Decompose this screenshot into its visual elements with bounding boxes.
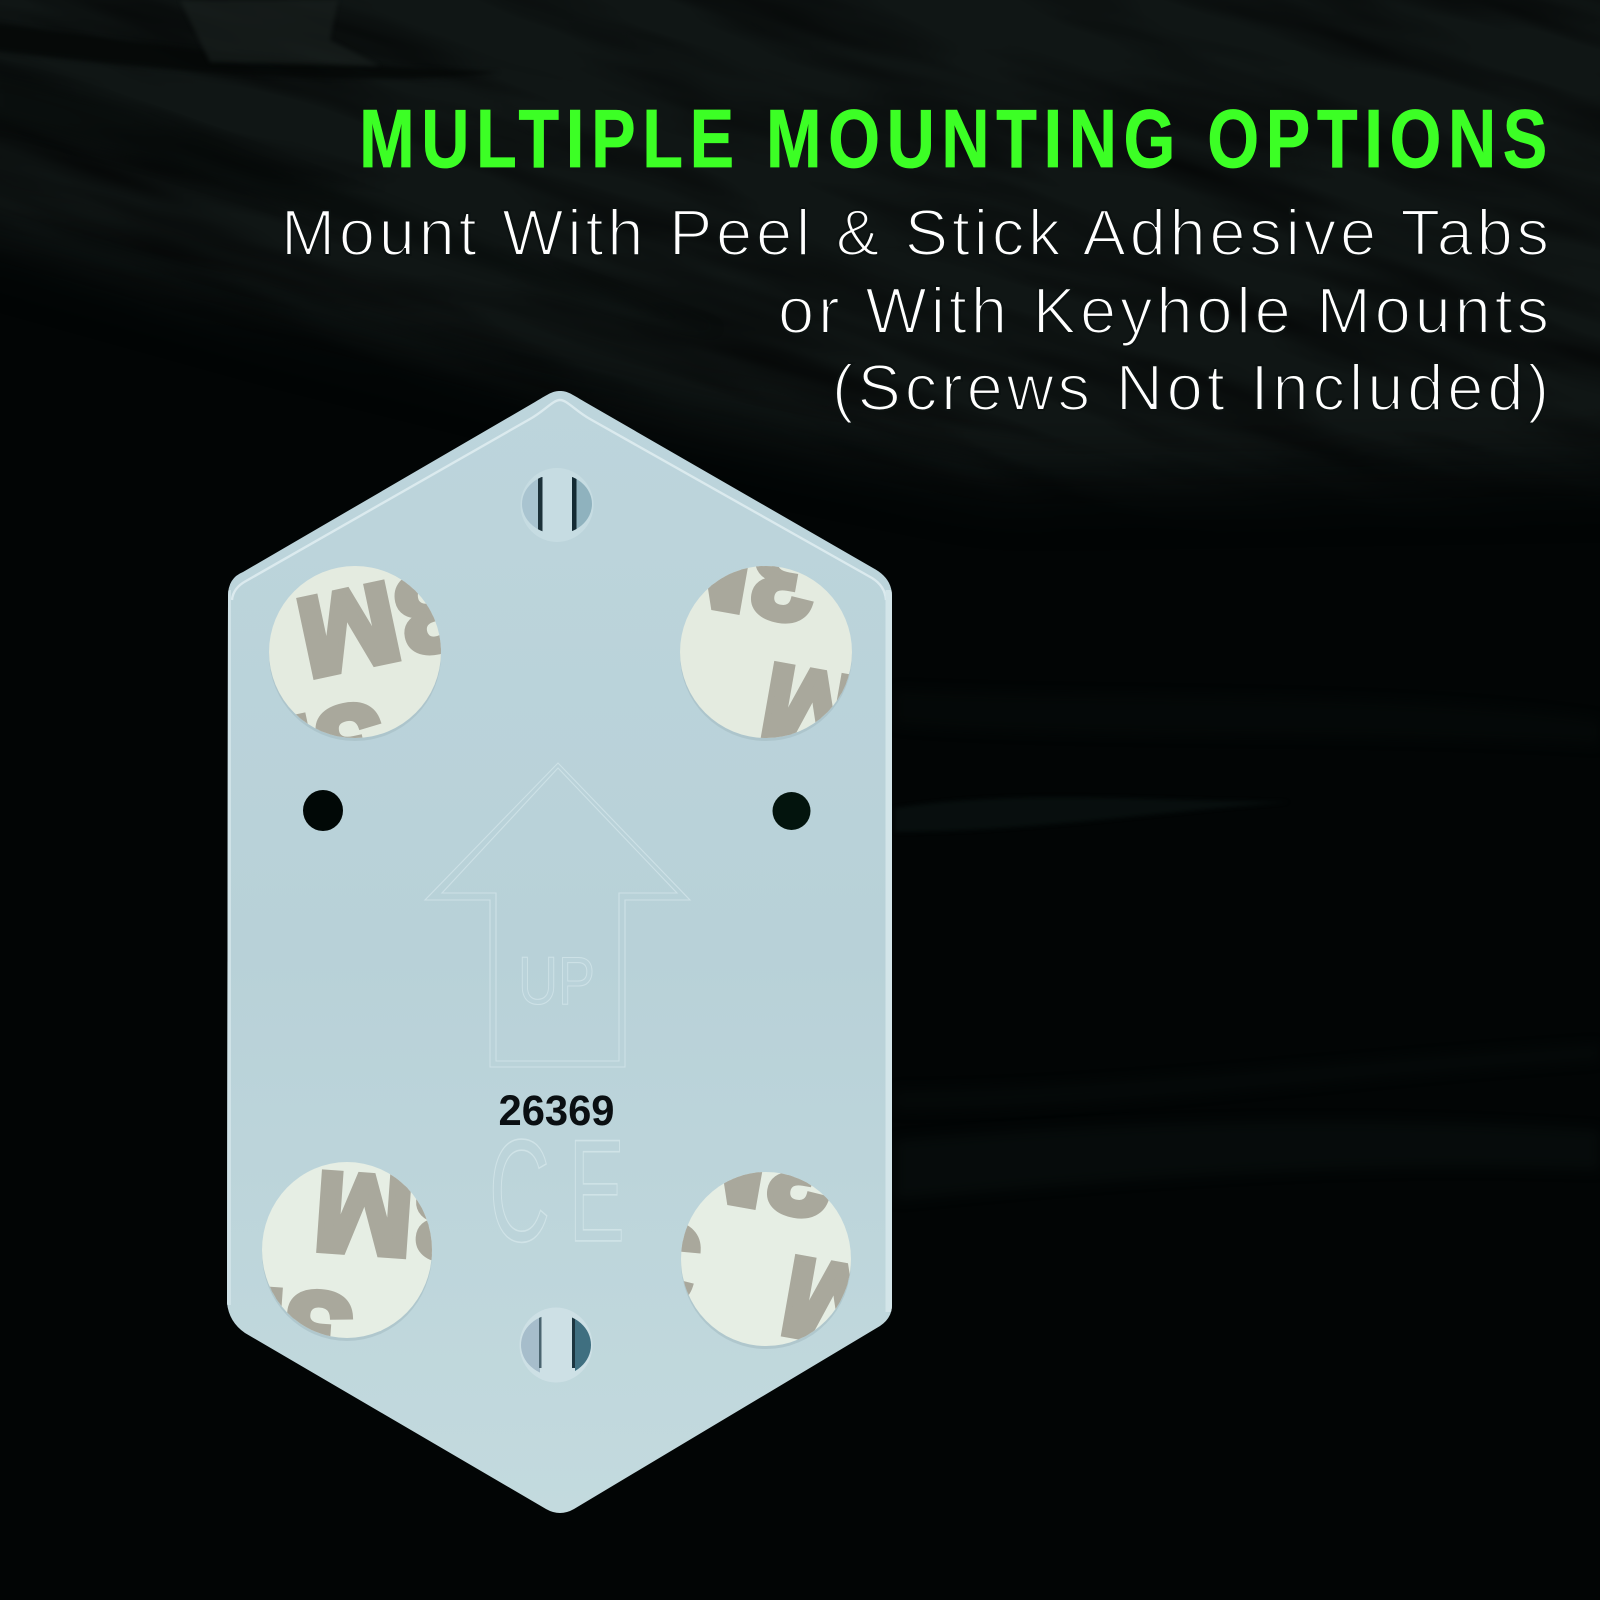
subtitle text block: Mount With Peel & Stick Adhesive Tabs	[281, 196, 1549, 269]
adhesive tab: bottom left: 3M	[181, 1260, 356, 1397]
title: MULTIPLE MOUNTING OPTIONS	[359, 92, 1547, 185]
adhesive tab: bottom right	[681, 1172, 851, 1349]
adhesive tab: bottom right: 3M	[772, 1232, 958, 1385]
adhesive tab: bottom right: 3M	[658, 1090, 844, 1243]
adhesive tab: top right: 3M	[642, 495, 828, 648]
printed number 26369: 26369	[498, 1087, 614, 1135]
subtitle text block	[281, 196, 1549, 424]
embossed up arrow	[425, 763, 690, 1067]
background: dark brush-stroke texture	[0, 0, 1600, 830]
plate bevel highlight	[229, 400, 889, 1312]
embossed UP label: UP	[518, 943, 595, 1019]
adhesive tab: bottom left	[262, 1162, 432, 1341]
bottom keyhole mount	[520, 1308, 595, 1382]
panel: mounting plate	[227, 391, 892, 1513]
adhesive tab: top left	[269, 566, 441, 741]
subtitle text block: (Screws Not Included)	[832, 351, 1549, 424]
adhesive tab: bottom right: 3M	[522, 1177, 708, 1330]
adhesive tab: top left: 3M	[287, 544, 476, 702]
subtitle text block: or With Keyhole Mounts	[778, 274, 1549, 347]
left screw hole	[303, 790, 343, 831]
plate body	[227, 391, 892, 1513]
adhesive tab: top right	[680, 566, 852, 741]
embossed CE mark: CE	[489, 1110, 625, 1273]
adhesive tab: bottom left: 3M	[310, 1148, 485, 1285]
top keyhole mount	[520, 468, 595, 542]
adhesive tab: top left: 3M	[208, 677, 397, 835]
right screw hole	[772, 792, 810, 830]
adhesive tab: top right: 3M	[751, 639, 937, 792]
